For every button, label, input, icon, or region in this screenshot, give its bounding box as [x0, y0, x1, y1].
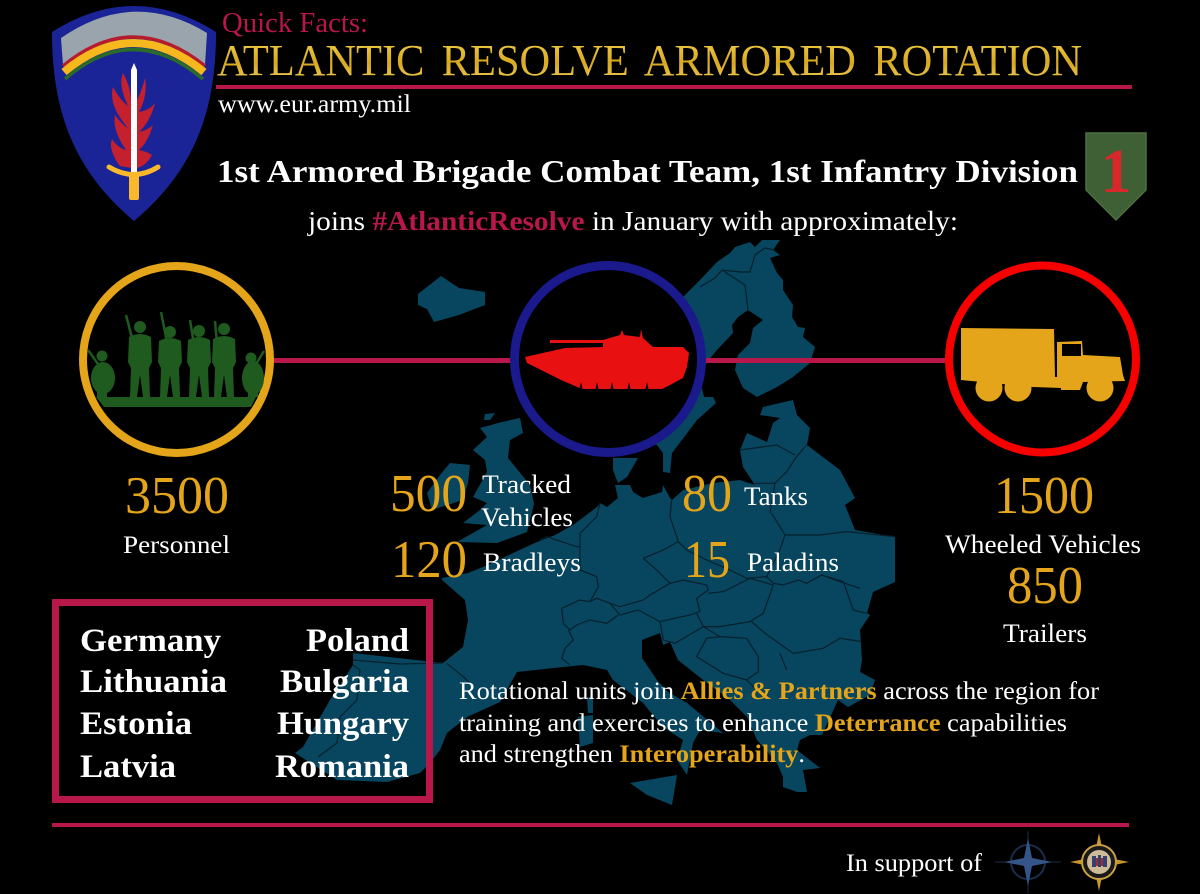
panel: host countries: Bulgaria: [280, 664, 409, 700]
stat: paladins: [684, 531, 839, 589]
panel: host countries: Germany: [80, 623, 222, 659]
text block: mission statement: and strengthen Interoperability .: [459, 741, 805, 768]
panel: host countries: Latvia: [80, 749, 176, 785]
stat: trailers: Trailers: [1003, 619, 1087, 648]
panel: host countries: [56, 602, 430, 800]
icon: 1st Infantry Division patch: 1: [1100, 138, 1132, 206]
stat: tanks: 80: [682, 465, 732, 523]
stat: paladins: 15: [684, 531, 730, 589]
stat: bradleys: 120: [391, 531, 467, 589]
heading: quick facts: Quick Facts:: [222, 7, 368, 39]
icon: NATO compass: [995, 831, 1061, 893]
panel: host countries: Hungary: [277, 706, 410, 742]
title: ATLANTIC RESOLVE ARMORED ROTATION: [217, 36, 1082, 85]
connector line: [274, 358, 945, 363]
stat: personnel: [123, 467, 230, 559]
stat: trailers: [1003, 557, 1087, 648]
icon: EUCOM emblem: [1070, 833, 1129, 891]
stat: tanks: Tanks: [744, 482, 808, 511]
stat: tracked vehicles: [390, 465, 573, 532]
stat: wheeled vehicles: 1500: [994, 467, 1094, 525]
map of Europe: [295, 240, 895, 805]
panel: host countries: Estonia: [80, 706, 192, 742]
stat: tracked vehicles: 500: [390, 465, 467, 523]
stat: bradleys: [391, 531, 581, 589]
panel: host countries: Poland: [306, 623, 409, 659]
icon: armored vehicle in circle: [514, 266, 702, 452]
stat: tracked vehicles: Tracked: [482, 470, 571, 499]
title rule: [216, 85, 1132, 89]
unit heading: 1st Armored Brigade Combat Team, 1st Infantry Division: [217, 153, 1078, 189]
footer rule: [52, 823, 1129, 827]
icon: soldiers in circle: [83, 266, 270, 453]
icon: truck in circle: [949, 266, 1136, 452]
stat: trailers: 850: [1007, 557, 1083, 615]
stat: personnel: 3500: [125, 467, 229, 525]
panel: host countries: Romania: [275, 749, 409, 785]
stat: tanks: [682, 465, 808, 523]
stat: tracked vehicles: Vehicles: [481, 503, 573, 532]
panel: host countries: Lithuania: [80, 664, 227, 700]
website: www.eur.army.mil: [218, 91, 411, 118]
stat: wheeled vehicles: Wheeled Vehicles: [945, 530, 1141, 559]
footer label: In support of: [846, 850, 983, 877]
icon: 1st Infantry Division patch: [1086, 133, 1146, 220]
text block: mission statement: Rotational units join Allies & Partners across the region for: [459, 678, 1100, 705]
text block: mission statement: [459, 678, 1100, 768]
stat: bradleys: Bradleys: [483, 548, 581, 577]
stat: wheeled vehicles: [945, 467, 1141, 559]
stat: paladins: Paladins: [747, 548, 839, 577]
subheading: joins #AtlanticResolve in January with approximately:: [307, 206, 958, 236]
stat: personnel: Personnel: [123, 532, 230, 559]
shield: US Army Europe: [52, 6, 216, 221]
text block: mission statement: training and exercises to enhance Deterrance capabilities: [459, 710, 1067, 737]
